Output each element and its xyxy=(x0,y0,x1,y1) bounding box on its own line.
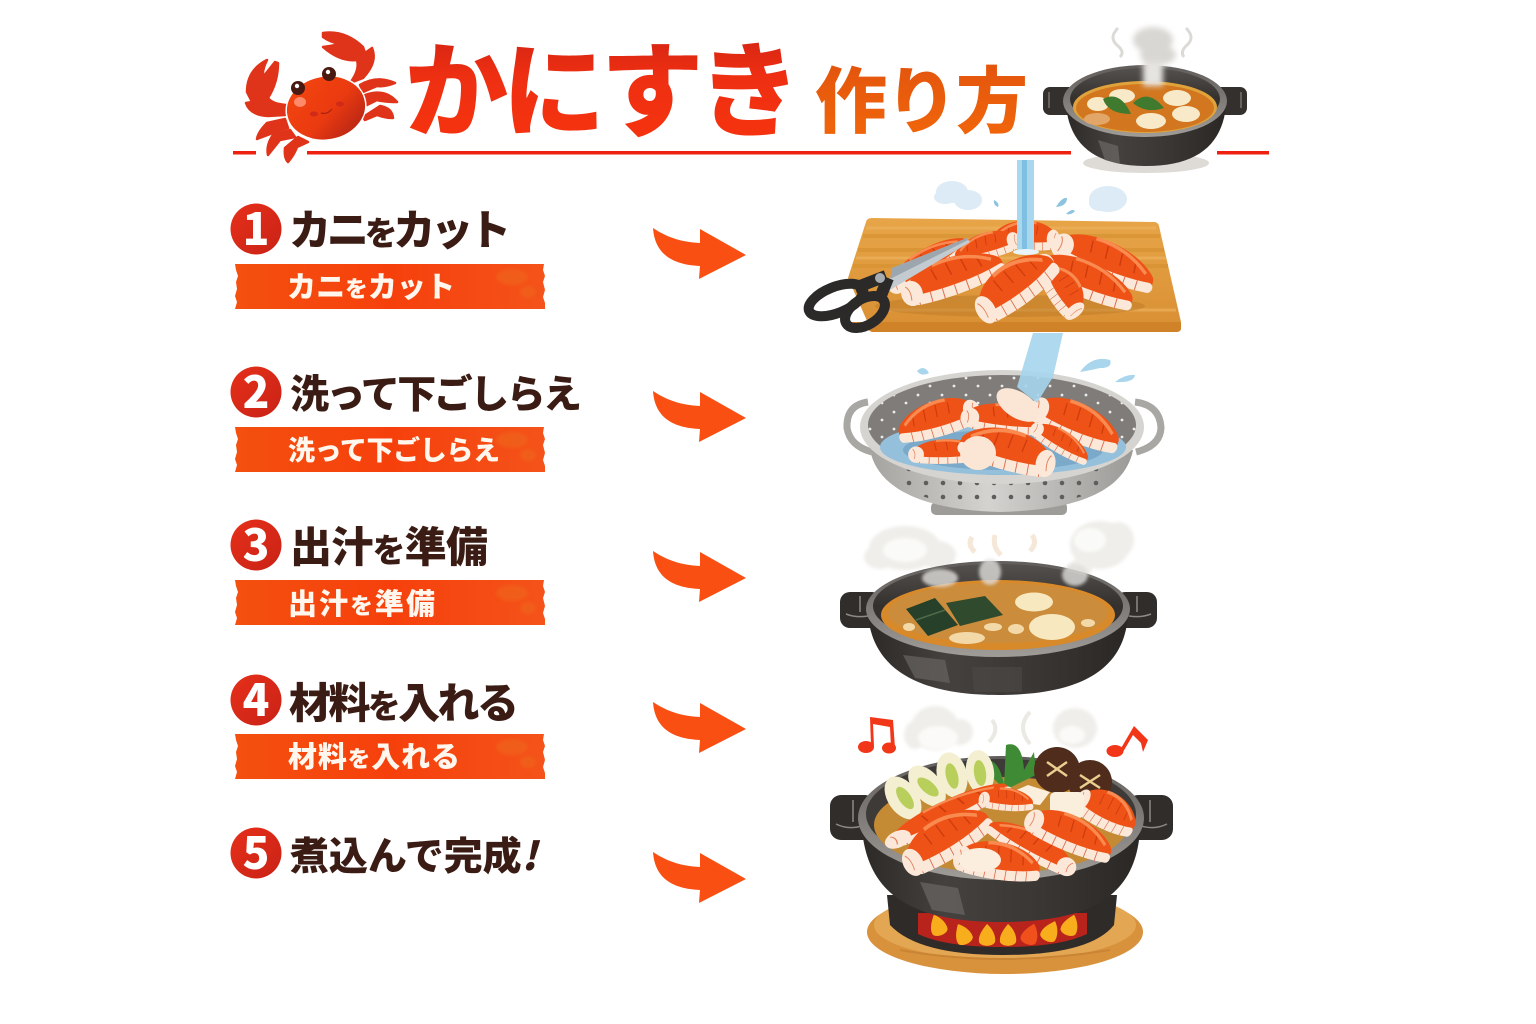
pot handles xyxy=(840,592,1157,628)
title: かにすき xyxy=(405,9,801,158)
banner 2: 洗って下ごしらえ xyxy=(288,429,500,468)
number badge 5 xyxy=(230,818,282,882)
arrow 1 xyxy=(653,228,746,279)
water clouds xyxy=(934,181,1127,214)
step heading 3: 出汁を準備 xyxy=(290,514,488,575)
step heading 1: カニをカット xyxy=(289,197,511,258)
banner 1 xyxy=(235,264,545,309)
step 1 xyxy=(230,194,545,309)
step 2 xyxy=(230,357,582,472)
number badge 2: 2 xyxy=(243,357,269,421)
cutting board xyxy=(848,218,1181,332)
splashes xyxy=(917,359,1135,382)
number badge 5: 5 xyxy=(243,818,269,882)
steam xyxy=(904,706,1097,750)
radish and tofu xyxy=(903,592,1095,644)
kombu xyxy=(906,596,1003,636)
illustration: finished kanisuki xyxy=(830,706,1173,974)
colander bowl xyxy=(860,370,1144,515)
music notes xyxy=(858,717,1148,757)
number badge 4 xyxy=(230,665,282,729)
illustration: dashi pot xyxy=(840,521,1157,695)
number badge 2 xyxy=(230,357,282,421)
crab in colander xyxy=(892,381,1127,479)
pot handles xyxy=(830,795,1173,840)
arrow 2 xyxy=(653,391,746,442)
burner xyxy=(887,895,1117,955)
colander handles xyxy=(847,402,1161,452)
broth xyxy=(881,580,1115,650)
pot body xyxy=(866,561,1130,695)
scissors xyxy=(804,238,970,335)
subtitle: 作り方 xyxy=(815,43,1028,148)
banner 4 xyxy=(235,734,545,779)
number badge 1: 1 xyxy=(243,194,269,258)
icon: small pot xyxy=(1043,27,1247,173)
steam xyxy=(864,521,1134,577)
crab legs in pot xyxy=(879,775,1144,890)
rising steam xyxy=(922,559,1088,587)
crab legs on board xyxy=(880,218,1161,327)
step heading 4: 材料を入れる xyxy=(289,670,519,731)
step 4 xyxy=(230,665,545,779)
arrow 4 xyxy=(653,702,746,753)
vegetables xyxy=(877,744,1112,826)
banner 3 xyxy=(235,580,545,625)
step heading 2: 洗って下ごしらえ xyxy=(290,364,582,420)
number badge 3 xyxy=(230,510,282,574)
number badge 1 xyxy=(230,194,282,258)
step 5 xyxy=(230,818,541,882)
banner 4: 材料を入れる xyxy=(288,734,460,776)
pot body xyxy=(858,756,1144,922)
banner 3: 出汁を準備 xyxy=(288,581,435,623)
broth xyxy=(874,777,1128,873)
water stream xyxy=(1017,333,1063,403)
trivet xyxy=(867,890,1143,974)
water stream xyxy=(1013,160,1039,255)
header xyxy=(233,9,1269,173)
number badge 3: 3 xyxy=(243,510,269,574)
arrow 5 xyxy=(653,852,746,903)
arrow 3 xyxy=(653,551,746,602)
step heading 5: 煮込んで完成! xyxy=(290,826,541,882)
illustration: cutting crab on board xyxy=(804,160,1181,335)
banner 1: カニをカット xyxy=(287,264,455,306)
step 3 xyxy=(230,510,545,625)
number badge 4: 4 xyxy=(243,665,269,729)
icon: crab xyxy=(246,33,397,162)
illustration: washing in colander xyxy=(847,333,1161,515)
banner 2 xyxy=(235,427,545,472)
